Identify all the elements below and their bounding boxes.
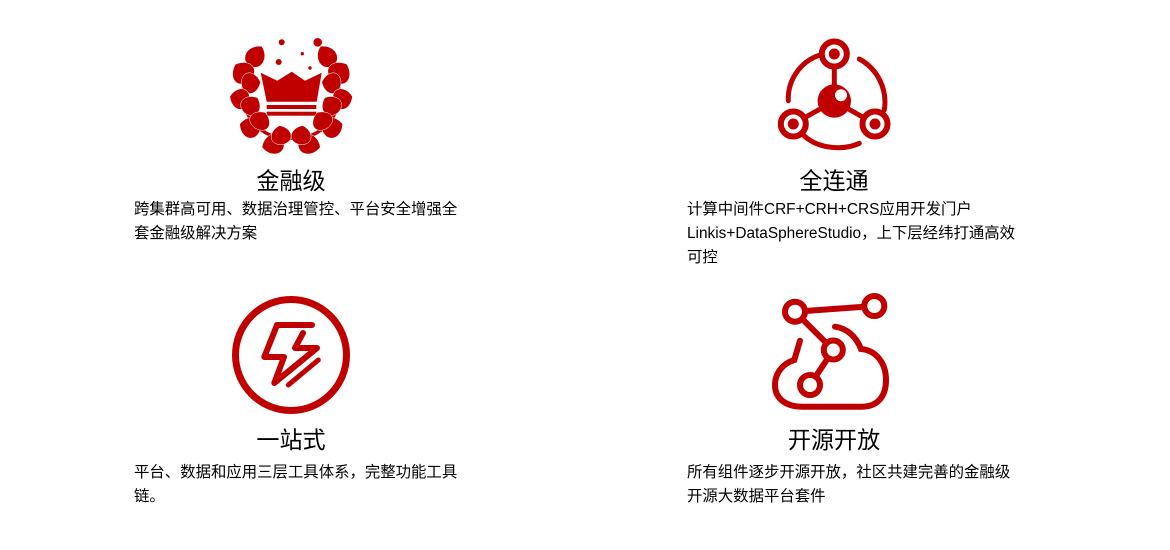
icon: cloud network [775,296,886,407]
text: 全连通 description: 可控 [687,249,718,266]
text: 全连通 description [687,200,1015,266]
heading: 全连通: 全连通 [799,168,869,194]
text: 一站式 description: 平台、数据和应用三层工具体系，完整功能工具 [134,464,457,481]
text: 全连通 description: 计算中间件CRF+CRH+CRS应用开发门户 [687,201,972,218]
heading: 开源开放: 开源开放 [788,427,880,453]
icon: laurel crown [227,38,356,157]
heading: 一站式: 一站式 [256,427,326,453]
heading: 金融级: 金融级 [256,168,326,194]
icon: lightning circle [236,300,346,410]
text: 一站式 description [134,464,457,505]
text: 全连通 description: Linkis+DataSphereStudio，上下层经纬打通高效 [687,225,1015,242]
icon: connected nodes [781,42,888,148]
text: 金融级 description: 套金融级解决方案 [134,225,257,242]
text: 开源开放 description [687,464,1010,505]
text: 一站式 description: 链。 [134,488,165,505]
text: 金融级 description [134,200,457,242]
text: 开源开放 description: 开源大数据平台套件 [687,488,826,505]
text: 开源开放 description: 所有组件逐步开源开放，社区共建完善的金融级 [687,464,1010,481]
text: 金融级 description: 跨集群高可用、数据治理管控、平台安全增强全 [134,201,457,218]
